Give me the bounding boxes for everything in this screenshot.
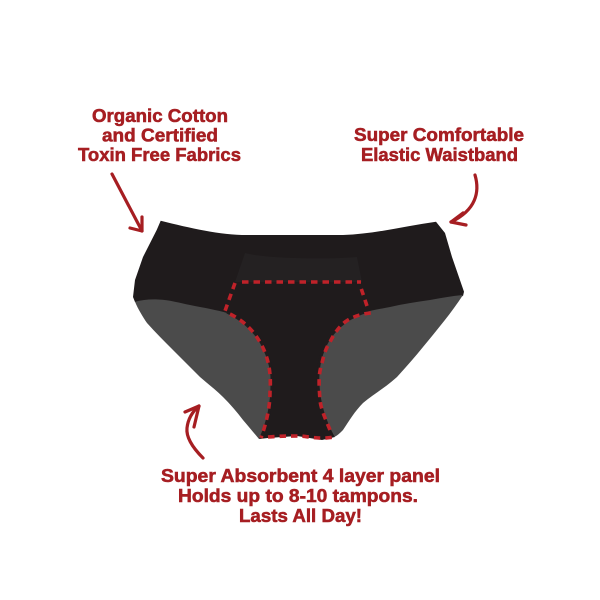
callout: organic cotton [78, 105, 241, 165]
red dashed stitching [225, 282, 371, 438]
callout: elastic waistband: Elastic Waistband [361, 144, 518, 165]
arrow: absorbent panel [185, 406, 203, 458]
black edge along the right leg opening [318, 311, 368, 437]
callout: absorbent panel: Holds up to 8-10 tampons. [178, 485, 418, 506]
callout: absorbent panel: Lasts All Day! [239, 505, 362, 526]
callout: organic cotton: Organic Cotton [92, 105, 228, 126]
front panel [235, 253, 362, 282]
arrow: organic cotton [112, 174, 142, 231]
left inner gray [135, 299, 271, 439]
black garment body [133, 221, 464, 440]
arrow: waistband [451, 175, 477, 225]
callout: organic cotton: Toxin Free Fabrics [78, 144, 241, 165]
callout: organic cotton: and Certified [102, 124, 218, 146]
callout: absorbent panel: Super Absorbent 4 layer panel [161, 465, 440, 486]
black edge along the left leg opening [227, 312, 272, 438]
callout: elastic waistband: Super Comfortable [354, 124, 524, 145]
right inner gray [319, 295, 463, 437]
callout: elastic waistband [354, 124, 524, 165]
callout: absorbent panel [161, 465, 440, 526]
underwear illustration [133, 221, 464, 440]
